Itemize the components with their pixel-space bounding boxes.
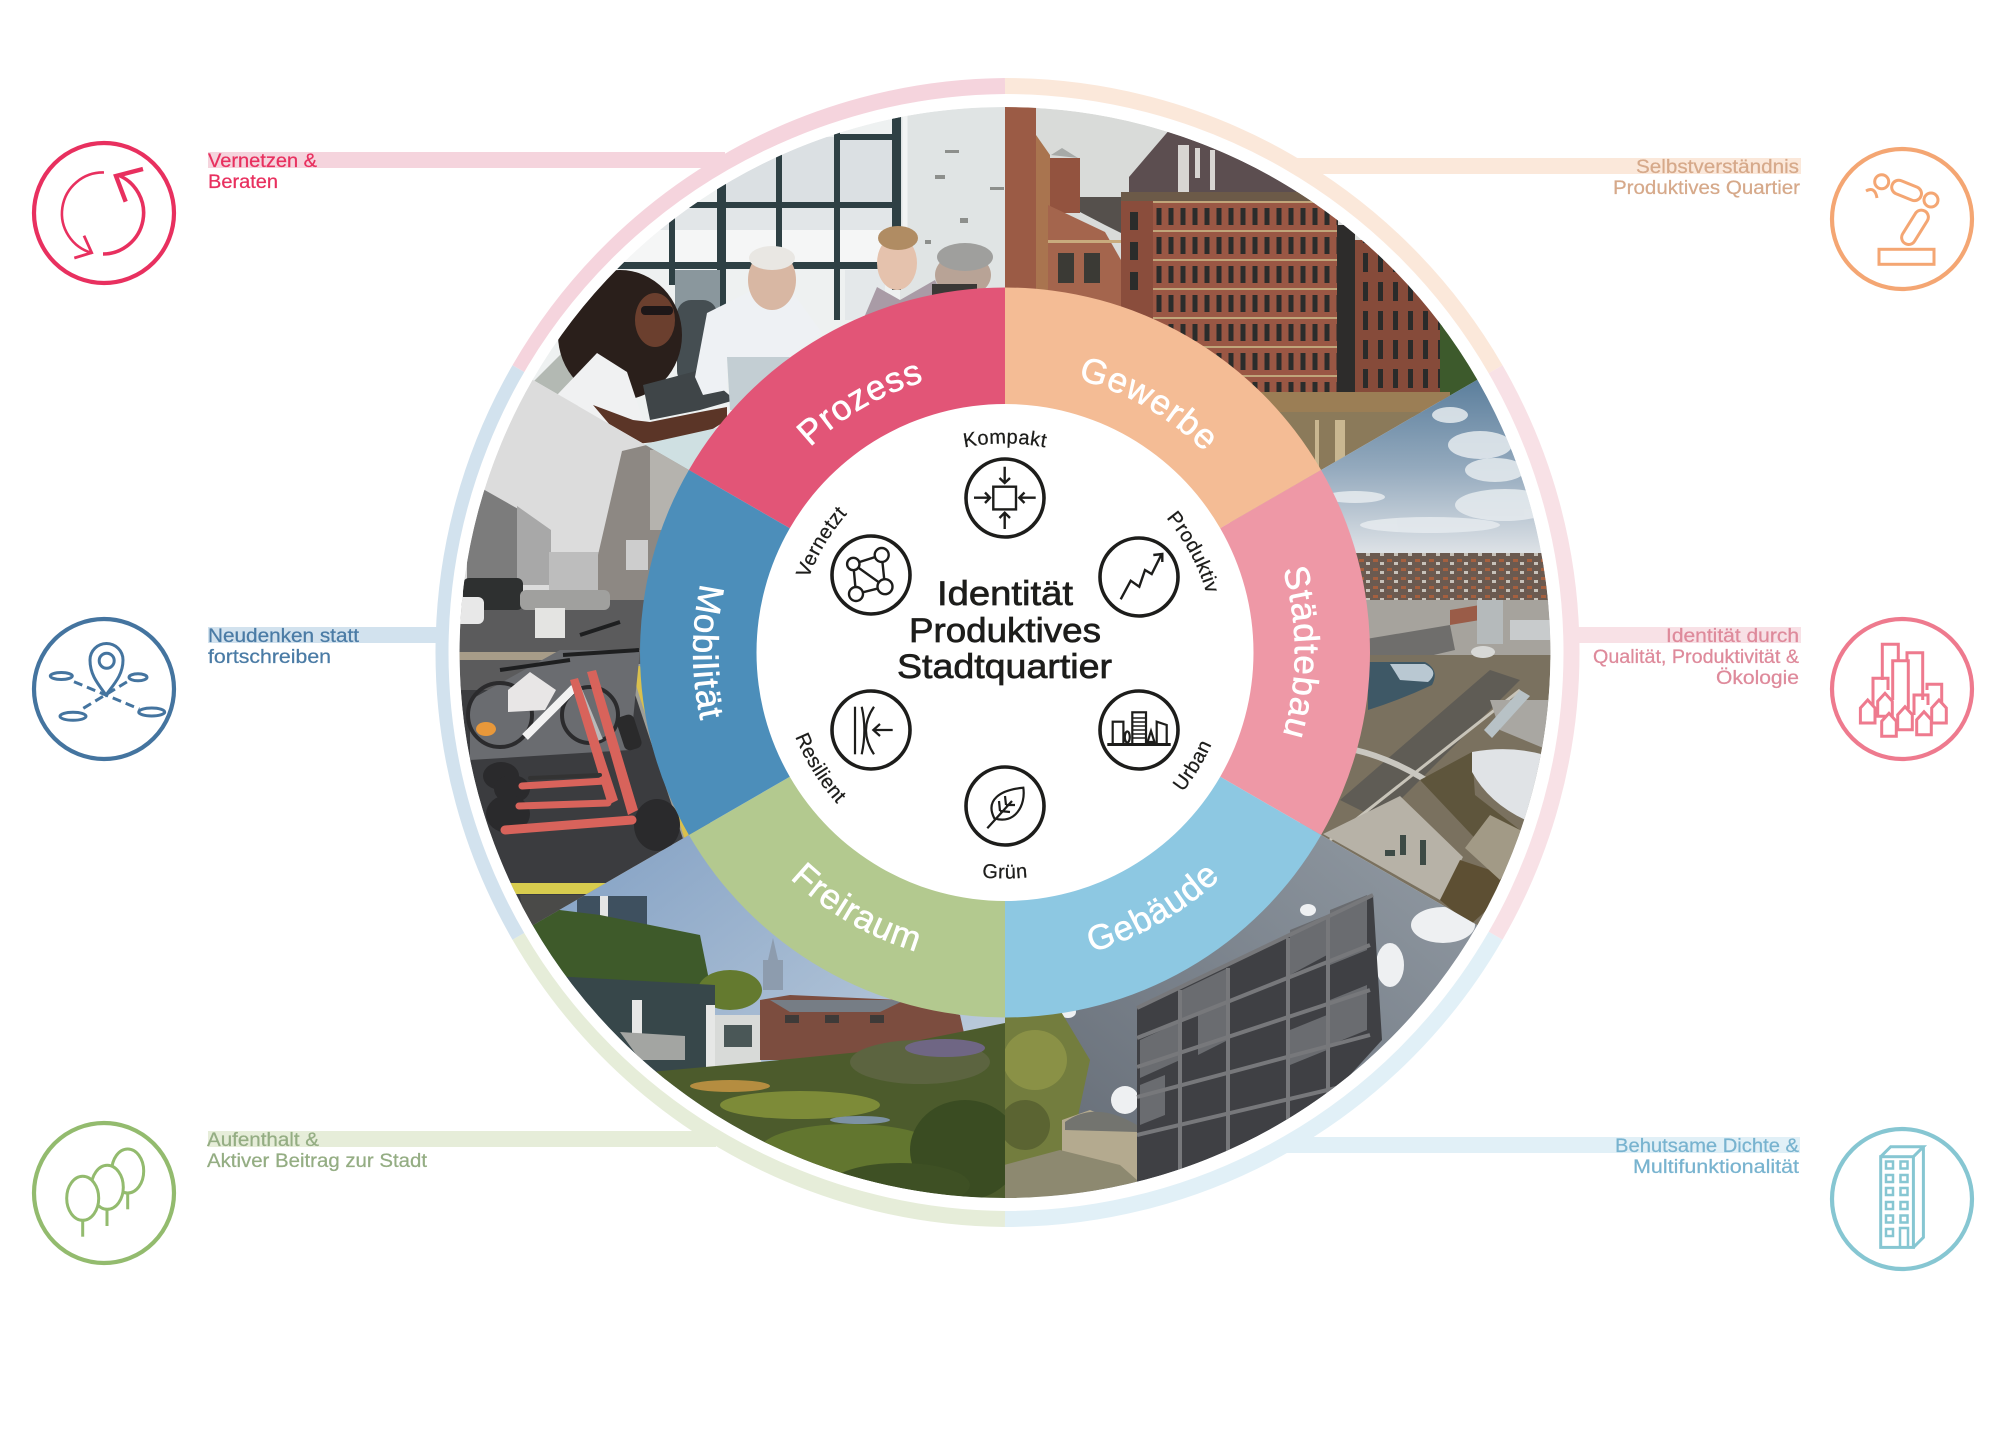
callout text: Neudenken statt fortschreiben: Neudenken statt [208, 626, 360, 647]
callout text: Aufenthalt & Aktiver Beitrag zur Stadt: Aufenthalt & [207, 1130, 319, 1151]
sector label: Freiraum: Freiraum [792, 862, 919, 952]
sector: Mobilität [531, 441, 897, 835]
small icon: Resilient [832, 691, 910, 769]
icon: location pin with routes [34, 619, 174, 759]
callout text: Identität durch Qualität, Produktivität & Ökologie: Qualität, Produktivität & [1593, 647, 1799, 668]
sector: Gebäude [955, 715, 1321, 1109]
sector: Städtebau [1113, 470, 1479, 864]
photo: street with e-scooters (Mobilität) [460, 380, 710, 926]
photo: park with skyline (Freiraum) [532, 835, 1005, 1198]
callout text: Aufenthalt & Aktiver Beitrag zur Stadt [207, 1130, 428, 1172]
connector and arc: Mobilität [208, 369, 519, 936]
callout text: Selbstverständnis Produktives Quartier: Produktives Quartier [1613, 178, 1801, 199]
callout text: Vernetzen & Beraten: Vernetzen & [208, 151, 317, 172]
callout text: Neudenken statt fortschreiben [208, 626, 360, 668]
photo ring mask: white ring edge [454, 102, 1556, 1204]
sector: Prozess [689, 196, 1055, 590]
callout text: Behutsame Dichte & Multifunktionalität: Multifunktionalität [1633, 1157, 1800, 1178]
callout text: Behutsame Dichte & Multifunktionalität [1615, 1136, 1800, 1178]
small icon: Kompakt [966, 459, 1044, 537]
icon: robot arm [1832, 149, 1972, 289]
sector label: Mobilität: Mobilität [692, 586, 724, 721]
callout text: Aufenthalt & Aktiver Beitrag zur Stadt: Aktiver Beitrag zur Stadt [207, 1151, 428, 1172]
photo: brick mill buildings (Gewerbe) [1005, 107, 1478, 522]
small icon: Produktiv [1100, 538, 1178, 616]
callout text: Identität durch Qualität, Produktivität & Ökologie: Identität durch [1666, 626, 1799, 647]
label: Kompakt: Kompakt [964, 430, 1047, 448]
sector label: Gewerbe: Gewerbe [1082, 358, 1214, 449]
label: Vernetzt: Vernetzt [795, 506, 848, 574]
outer ring with connector lines [208, 86, 1801, 1219]
callout text: Identität durch Qualität, Produktivität & Ökologie: Ökologie [1716, 668, 1799, 689]
photo: office meeting (Prozess) [533, 107, 1005, 470]
centre title [897, 575, 1112, 686]
photo: aerial city view (Städtebau) [1300, 360, 1560, 935]
connector and arc: Städtebau [1496, 369, 1801, 936]
sector: Gewerbe [1005, 288, 1321, 528]
callout text: Identität durch Qualität, Produktivität & Ökologie [1593, 626, 1799, 689]
connector and arc: Freiraum [208, 936, 1005, 1219]
connector and arc: Gebäude [1005, 936, 1800, 1219]
icon: circular arrows [34, 143, 174, 283]
sector: Freiraum [689, 777, 1005, 1018]
label: Resilient: Resilient [796, 732, 846, 804]
photo: grey office building (Gebäude) [1005, 830, 1478, 1198]
icon: trees [34, 1123, 174, 1263]
sector label: Prozess: Prozess [796, 366, 922, 446]
label: Produktiv: Produktiv [1167, 510, 1217, 591]
label: Grün: Grün [983, 864, 1026, 879]
callout text: Neudenken statt fortschreiben: fortschreiben [208, 647, 331, 668]
connector and arc: Prozess [208, 86, 1005, 369]
connector and arc: Gewerbe [1005, 86, 1801, 369]
callout text: Vernetzen & Beraten: Beraten [208, 172, 278, 193]
sector label: Gebäude: Gebäude [1088, 868, 1217, 950]
callout text: Vernetzen & Beraten [208, 151, 317, 193]
callout text: Selbstverständnis Produktives Quartier [1613, 157, 1801, 199]
centre disc [755, 402, 1255, 902]
centre title: Identität [937, 575, 1074, 613]
small icon: Urban [1100, 691, 1178, 769]
centre title: Stadtquartier [897, 648, 1112, 686]
sector label: Städtebau: Städtebau [1283, 567, 1320, 738]
small icon: Vernetzt [832, 536, 910, 614]
icon: high-rise building [1832, 1129, 1972, 1269]
small icon: Grün [966, 767, 1044, 845]
callout text: Behutsame Dichte & Multifunktionalität: Behutsame Dichte & [1615, 1136, 1799, 1157]
callout text: Selbstverständnis Produktives Quartier: Selbstverständnis [1636, 157, 1799, 178]
centre title: Produktives [909, 612, 1101, 650]
label: Urban: Urban [1172, 742, 1212, 790]
icon: city skyline with houses [1832, 619, 1972, 759]
